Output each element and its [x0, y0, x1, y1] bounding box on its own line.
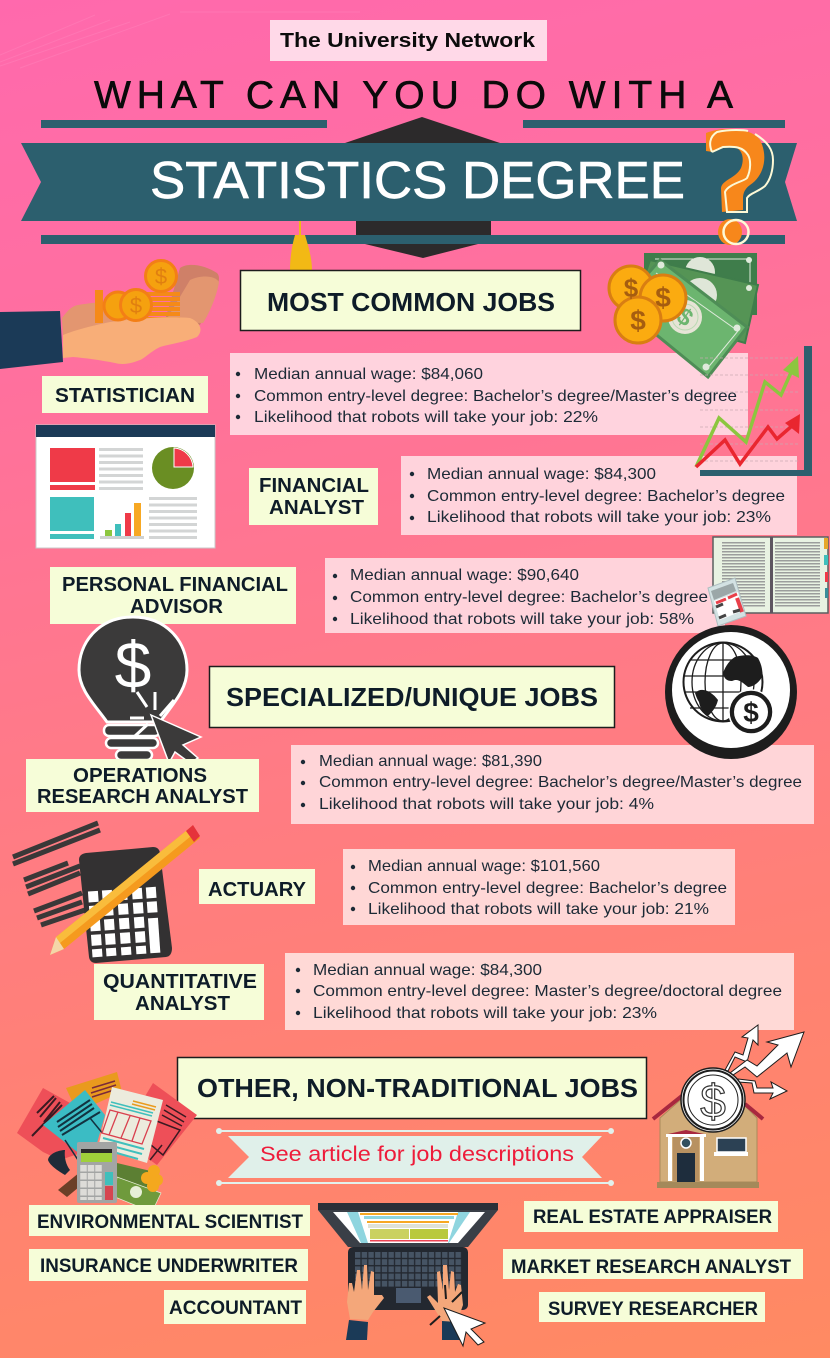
panel: statistician details: Likelihood that robots will take your job: 22% — [254, 409, 598, 426]
label: personal financial advisor — [50, 567, 296, 624]
label: quantitative analyst: ANALYST — [135, 993, 230, 1015]
chart: rising lines — [696, 346, 812, 476]
icon: question mark — [706, 129, 773, 245]
label: market research analyst — [503, 1249, 803, 1279]
label: real estate appraiser — [524, 1201, 778, 1232]
graduation cap and banner: STATISTICS DEGREE — [150, 152, 685, 210]
label: statistician — [42, 376, 208, 413]
illustration: report — [36, 425, 215, 548]
icon: house with coin and arrows: $ — [700, 1075, 726, 1127]
icon: light bulb with cursor: $ — [115, 628, 151, 702]
panel: operations research details: Likelihood that robots will take your job: 4% — [319, 796, 654, 813]
heading: specialized jobs — [210, 666, 614, 728]
label: operations research analyst: OPERATIONS — [73, 765, 207, 787]
icon: hand holding coins: $ — [130, 293, 142, 318]
label: operations research analyst — [26, 759, 259, 812]
icon: laptop with hands — [318, 1203, 498, 1346]
panel: actuary details: Median annual wage: $101,560 — [368, 858, 600, 875]
icon: money and coins: $ — [655, 282, 671, 313]
label: environmental scientist — [29, 1205, 310, 1236]
label: market research analyst: MARKET RESEARCH ANALYST — [511, 1257, 791, 1278]
panel: statistician details: Median annual wage: $84,060 — [254, 366, 483, 383]
heading: most common jobs — [240, 270, 580, 330]
label: personal financial advisor: PERSONAL FINANCIAL — [62, 574, 288, 596]
icon: open book — [713, 537, 828, 613]
panel: actuary details: Likelihood that robots will take your job: 21% — [368, 901, 709, 918]
panel: operations research details: Common entry-level degree: Bachelor’s degree/Master’s degree — [319, 774, 802, 791]
icon: money and coins: $ — [630, 305, 646, 336]
label: actuary: ACTUARY — [208, 879, 307, 901]
panel: statistician details — [230, 353, 748, 435]
icon: hand holding coins: $ — [155, 264, 167, 289]
icon: hand holding coins — [0, 260, 219, 369]
panel: actuary details — [343, 849, 735, 925]
icon: house with coin and arrows — [653, 1025, 804, 1188]
brand label — [270, 20, 547, 61]
label: real estate appraiser: REAL ESTATE APPRAISER — [533, 1207, 772, 1228]
panel: personal financial advisor details: Median annual wage: $90,640 — [350, 567, 579, 584]
icon: money and coins — [609, 253, 758, 377]
panel: quantitative analyst details — [285, 953, 794, 1030]
panel: personal financial advisor details: Likelihood that robots will take your job: 58% — [350, 611, 694, 628]
brand label: The University Network — [280, 30, 536, 52]
panel: financial analyst details: Common entry-level degree: Bachelor’s degree — [427, 488, 785, 505]
panel: actuary details: Common entry-level degree: Bachelor’s degree — [368, 880, 727, 897]
ribbon: see article — [216, 1128, 614, 1186]
panel: quantitative analyst details: Likelihood that robots will take your job: 23% — [313, 1005, 657, 1022]
label: financial analyst: ANALYST — [269, 497, 364, 519]
label: insurance underwriter: INSURANCE UNDERWRITER — [40, 1256, 298, 1277]
icon: globe with dollar — [665, 625, 797, 759]
heading: other jobs: OTHER, NON-TRADITIONAL JOBS — [197, 1073, 638, 1103]
label: financial analyst: FINANCIAL — [259, 475, 369, 497]
label: financial analyst — [249, 468, 378, 525]
panel: operations research details — [291, 745, 814, 824]
panel: operations research details: Median annual wage: $81,390 — [319, 753, 542, 770]
label: accountant: ACCOUNTANT — [169, 1298, 302, 1319]
graduation cap and banner — [21, 117, 797, 270]
panel: personal financial advisor details — [325, 558, 725, 633]
panel: financial analyst details: Median annual wage: $84,300 — [427, 466, 656, 483]
heading: other jobs — [178, 1058, 646, 1118]
icon: light bulb with cursor — [79, 617, 201, 763]
icon: money and coins: $ — [671, 303, 698, 333]
label: accountant — [164, 1290, 306, 1324]
label: environmental scientist: ENVIRONMENTAL SCIENTIST — [37, 1212, 303, 1233]
label: personal financial advisor: ADVISOR — [130, 596, 224, 618]
icon: documents and calculator — [17, 1072, 197, 1212]
label: operations research analyst: RESEARCH ANALYST — [37, 786, 248, 808]
label: quantitative analyst: QUANTITATIVE — [103, 971, 257, 993]
label: survey researcher: SURVEY RESEARCHER — [548, 1299, 758, 1320]
label: insurance underwriter — [29, 1249, 308, 1281]
icon: calculator and pencil — [13, 823, 200, 963]
icon: globe with dollar: $ — [743, 697, 759, 728]
heading: most common jobs: MOST COMMON JOBS — [267, 287, 555, 317]
panel: statistician details: Common entry-level degree: Bachelor’s degree/Master’s degree — [254, 388, 737, 405]
panel: financial analyst details — [401, 456, 797, 535]
panel: personal financial advisor details: Common entry-level degree: Bachelor’s degree — [350, 589, 708, 606]
icon: calculator — [708, 578, 746, 626]
heading: specialized jobs: SPECIALIZED/UNIQUE JOBS — [226, 682, 598, 712]
label: survey researcher — [539, 1292, 765, 1322]
panel: quantitative analyst details: Median annual wage: $84,300 — [313, 962, 542, 979]
title line: WHAT CAN YOU DO WITH A — [94, 74, 733, 117]
ribbon: see article: See article for job descriptions — [260, 1143, 574, 1166]
panel: financial analyst details: Likelihood that robots will take your job: 23% — [427, 509, 771, 526]
panel: quantitative analyst details: Common entry-level degree: Master’s degree/doctoral degree — [313, 983, 782, 1000]
icon: money and coins: $ — [624, 273, 639, 303]
label: quantitative analyst — [94, 964, 264, 1020]
faint texture top left — [0, 12, 360, 68]
label: statistician: STATISTICIAN — [55, 385, 195, 407]
label: actuary — [199, 869, 315, 904]
